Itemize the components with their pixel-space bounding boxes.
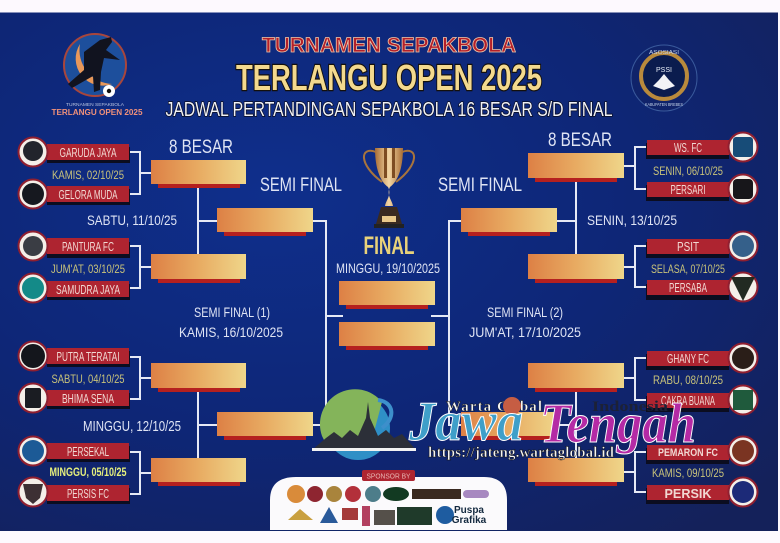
logo: Terlangu Open: TURNAMEN SEPAKBOLA <box>66 102 124 107</box>
section headings: KAMIS, 16/10/2025 <box>179 324 283 340</box>
date: Minggu 05/10: MINGGU, 05/10/25 <box>50 467 127 479</box>
team: Persik: PERSIK <box>664 486 712 501</box>
date: Selasa 07/10: SELASA, 07/10/25 <box>651 264 725 276</box>
team: Pantura FC: PANTURA FC <box>62 239 114 254</box>
watermark globe logo <box>312 389 416 460</box>
date: Sabtu 04/10: SABTU, 04/10/25 <box>52 374 124 386</box>
sponsor logos: Puspa <box>454 505 484 516</box>
section headings: JUM'AT, 17/10/2025 <box>469 324 581 340</box>
label: semi final left: SEMI FINAL <box>260 175 342 196</box>
subheading: schedule: JADWAL PERTANDINGAN SEPAKBOLA 16 BESAR S/D FINAL <box>166 99 612 121</box>
label: semi final right: SEMI FINAL <box>438 175 522 196</box>
date: Senin 06/10: SENIN, 06/10/25 <box>653 166 723 178</box>
team: PSIT: PSIT <box>677 239 699 254</box>
watermark: Warta Global Jawa Tengah <box>312 389 696 461</box>
team: Ghany FC: GHANY FC <box>667 351 709 366</box>
date: Rabu 08/10: RABU, 08/10/25 <box>653 375 723 387</box>
team: WS. FC: WS. FC <box>674 140 702 155</box>
team: Gelora Muda: GELORA MUDA <box>58 187 118 202</box>
logo: Asosiasi PSSI <box>631 45 697 111</box>
team: Cakra Buana: CAKRA BUANA <box>661 393 715 408</box>
semi final slots <box>217 208 557 440</box>
team: Samudra Jaya: SAMUDRA JAYA <box>56 282 120 297</box>
heading: Terlangu Open 2025: TERLANGU OPEN 2025 <box>236 57 542 98</box>
right team bars <box>646 140 729 504</box>
right team badges <box>728 132 758 506</box>
team: Bhima Sena: BHIMA SENA <box>62 391 114 406</box>
date: final: MINGGU, 19/10/2025 <box>336 260 440 276</box>
logo: Asosiasi PSSI: PSSI <box>656 67 672 74</box>
watermark: Jawa: Jawa <box>408 391 523 453</box>
section headings <box>83 130 677 435</box>
left team bars <box>47 144 130 504</box>
team: Persis FC: PERSIS FC <box>67 486 109 501</box>
label: final: FINAL <box>364 232 414 260</box>
right 8 besar slots <box>528 153 624 486</box>
logo: Asosiasi PSSI: KABUPATEN BREBES <box>645 102 683 107</box>
left 8 besar slots <box>151 160 246 486</box>
date: Kamis 09/10: KAMIS, 09/10/25 <box>652 468 724 480</box>
watermark globe icon <box>503 397 521 415</box>
sponsor label: SPONSOR BY <box>366 472 410 480</box>
icon: trophy <box>364 148 414 228</box>
sponsor panel <box>270 470 507 530</box>
date: Semi final 2: SEMI FINAL (2) <box>487 304 563 320</box>
date: Minggu: MINGGU, 12/10/25 <box>83 418 181 435</box>
team: Garuda Jaya: GARUDA JAYA <box>60 145 117 160</box>
team: Persekal: PERSEKAL <box>67 444 109 459</box>
logo: Terlangu Open: TERLANGU OPEN 2025 <box>52 108 143 117</box>
watermark: Tengah: Tengah <box>540 393 696 455</box>
logo: Terlangu Open <box>52 34 143 117</box>
final slots <box>339 281 435 350</box>
team: Persari: PERSARI <box>670 182 706 197</box>
date: Kamis 02/10: KAMIS, 02/10/25 <box>52 170 124 182</box>
team: Persaba: PERSABA <box>669 280 707 295</box>
sponsor logos <box>287 485 489 526</box>
label: 8 besar right: 8 BESAR <box>548 130 612 151</box>
date: Sabtu: SABTU, 11/10/25 <box>87 212 177 228</box>
date: Senin: SENIN, 13/10/25 <box>587 212 677 228</box>
match dates <box>50 166 725 480</box>
left team badges <box>18 138 48 506</box>
label: 8 besar left: 8 BESAR <box>169 137 233 158</box>
watermark: URL: https://jateng.wartaglobal.id <box>428 445 615 461</box>
bracket connector lines <box>129 147 647 494</box>
date: Jumat 03/10: JUM'AT, 03/10/25 <box>51 264 125 276</box>
date: Semi final 1: SEMI FINAL (1) <box>194 304 270 320</box>
watermark: Indonesia: Indonesia <box>592 399 669 415</box>
logo: Asosiasi PSSI: ASOSIASI <box>649 50 679 56</box>
title block <box>166 34 612 121</box>
sponsor logos: Grafika <box>452 515 487 526</box>
team: Putra Teratai: PUTRA TERATAI <box>56 349 120 364</box>
heading: Turnamen Sepakbola: TURNAMEN SEPAKBOLA <box>262 34 516 57</box>
team: Pemaron FC: PEMARON FC <box>658 447 718 459</box>
watermark: Warta Global: Warta Gl bal <box>446 399 542 415</box>
